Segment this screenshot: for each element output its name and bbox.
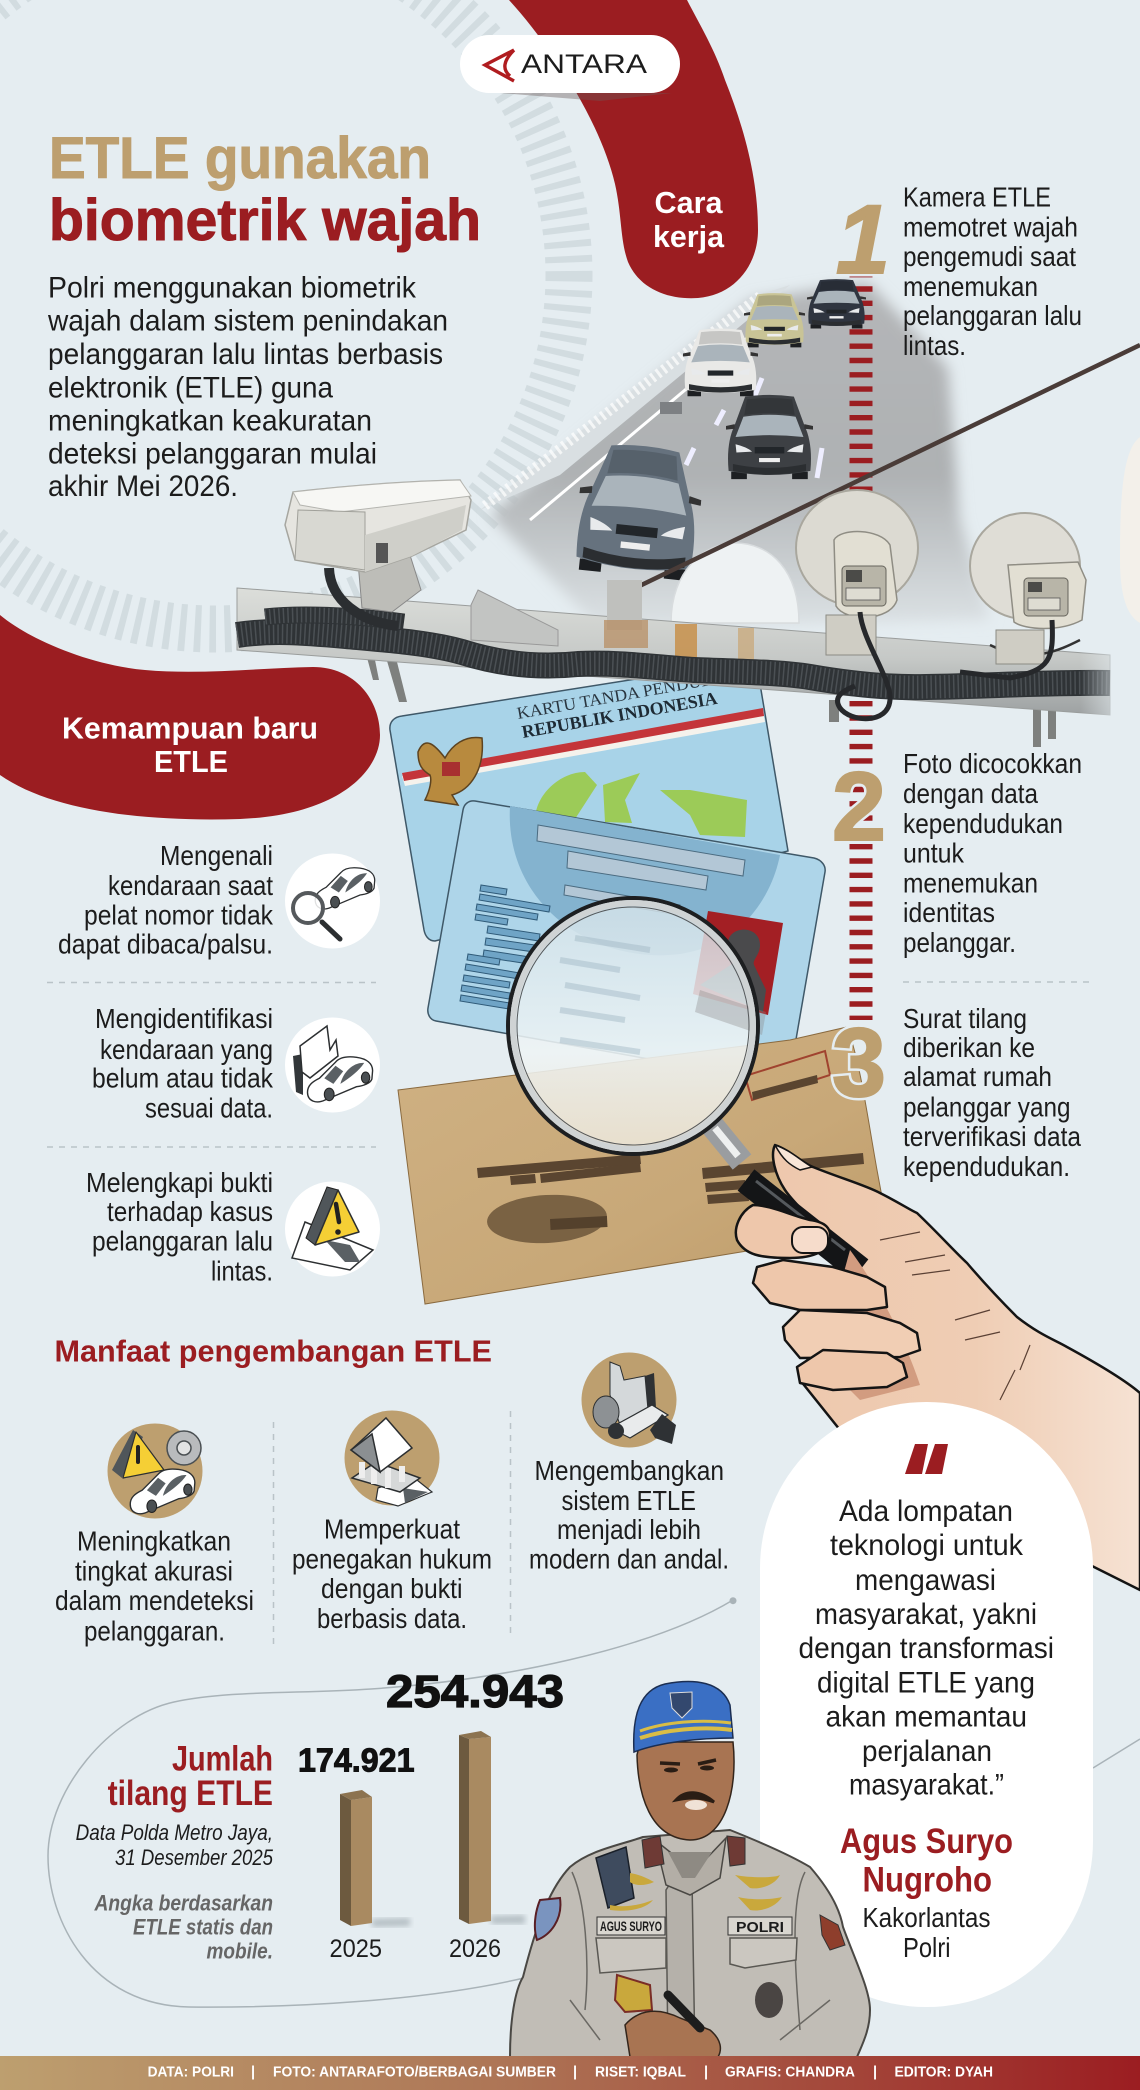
footer bar: GRAFIS: CHANDRA [725,2065,856,2081]
text: capability 1: Mengenali [160,840,273,871]
icon: car with documents [285,1018,380,1112]
pockets and seams [596,1868,797,2057]
flashlight [668,1995,700,2028]
illustration: magnifier lens [508,898,766,1154]
text: step 3: terverifikasi data [903,1121,1082,1152]
text: speaker name: Nugroho [862,1860,992,1900]
dashed dividers [47,982,376,1147]
illustration: police officer [510,1682,870,2057]
value 254.943: 254.943 [386,1666,564,1717]
icon: car with magnifier [285,854,380,948]
illustration: right side pale column [1120,437,1140,623]
text: quote: akan memantau [826,1700,1027,1734]
illustration: cars on the road [571,279,866,582]
text: step 1 [903,182,1082,361]
text: step 2: dengan data [903,778,1039,809]
face [637,1742,734,1840]
text: data note: ETLE statis dan [133,1914,273,1940]
text: quote: perjalanan [862,1735,992,1768]
heading: Manfaat pengembangan ETLE: Manfaat pengembangan ETLE [54,1334,492,1368]
name tag AGUS SURYO: AGUS SURYO [600,1918,662,1934]
shoulder patches [535,1898,560,1940]
text: benefit 3: modern dan andal. [529,1544,729,1575]
name tag POLRI [728,1917,792,1936]
text: benefit 1: tingkat akurasi [75,1556,233,1587]
text: capability 1: kendaraan saat [108,870,273,901]
text: benefit 1: pelanggaran. [84,1615,225,1646]
text: capability 1 [58,840,273,960]
text: step 3: kependudukan. [903,1151,1070,1182]
text: capability 3: terhadap kasus [107,1196,273,1227]
text: capability 2: belum atau tidak [92,1063,273,1094]
epaulettes [642,1836,745,1868]
text: step 2: untuk [903,838,964,869]
text: step 3: Surat tilang [903,1003,1027,1034]
illustration: KTP back card: REPUBLIK INDONESIA [520,688,719,742]
intro paragraph: pelanggaran lalu lintas berbasis [48,338,443,371]
number 3: 3 [832,1008,886,1117]
text: quote: masyarakat.” [849,1768,1004,1801]
footer bar: FOTO: ANTARAFOTO/BERBAGAI SUMBER [273,2065,556,2081]
insignia [610,1873,782,1911]
footer bar: DATA: POLRI [148,2065,234,2081]
text: benefit 1: Meningkatkan [77,1526,231,1556]
heading: Jumlah tilang ETLE: tilang ETLE [108,1774,273,1813]
neck shirt [668,1852,712,1878]
text: benefit 2: dengan bukti [321,1573,462,1604]
text: step 1: pelanggaran lalu [903,300,1082,331]
text: step 3 [903,1003,1082,1182]
chest badge [615,1975,652,2012]
title [49,126,481,253]
text: benefit 1 [55,1526,254,1646]
icon: courthouse [344,1410,440,1506]
text: capability 2 [92,1003,273,1124]
illustration: KTP back card: KARTU TANDA PENDUDUK [515,665,741,723]
title: biometrik wajah [49,188,481,253]
heading: Cara kerja [653,185,725,254]
value 174.921: 174.921 [298,1741,414,1778]
text: benefit 3: sistem ETLE [562,1485,696,1516]
illustration: hand palm and thumb [773,1145,1140,1590]
icon: accuracy [108,1424,202,1518]
text: step 2: pelanggar. [903,927,1016,958]
bar 2025 [340,1790,410,1927]
dashed red route line [850,272,872,1020]
text: capability 3: lintas. [211,1256,273,1286]
text: capability 3: pelanggaran lalu [92,1226,273,1257]
text: capability 3: Melengkapi bukti [86,1167,273,1198]
hands [625,2011,720,2057]
heading: Cara kerja: kerja [653,219,725,254]
text: quote: teknologi untuk [830,1529,1024,1562]
text: capability 2: kendaraan yang [100,1034,273,1065]
text: quote [798,1495,1054,1801]
text: capability 3 [86,1167,273,1286]
number 2: 2 [832,752,886,861]
text: speaker name [840,1822,1013,1963]
illustration: dish camera right [960,513,1086,678]
text: benefit 3: menjadi lebih [557,1514,701,1545]
number 3: 3 [832,1008,886,1117]
label 2026: 2026 [449,1935,501,1963]
illustration: KTP back card [390,660,788,941]
text: quote: dengan transformasi [798,1632,1054,1665]
text: data note: mobile. [206,1938,273,1964]
text: capability 1: pelat nomor tidak [84,900,273,931]
illustration: guy wire [625,345,1140,593]
heading: Jumlah tilang ETLE [108,1740,273,1813]
text: benefit 2: Memperkuat [324,1514,460,1544]
heading: Jumlah tilang ETLE: Jumlah [172,1740,273,1778]
text: step 1: memotret wajah [903,212,1078,242]
text: benefit 3 [529,1455,729,1575]
sleeve seams [570,1872,830,2040]
footer bar: | [704,2065,708,2081]
footer bar: | [573,2065,577,2081]
police cap [634,1682,733,1752]
intro paragraph: elektronik (ETLE) guna [48,372,333,405]
panel: Cara kerja ribbon [509,0,758,298]
text: step 3: alamat rumah [903,1061,1052,1092]
text: capability 1: dapat dibaca/palsu. [58,929,273,960]
text: step 2 [903,748,1082,958]
bar 2026 [459,1731,525,1924]
text: quote: mengawasi [855,1564,996,1597]
footer bar: EDITOR: DYAH [894,2065,993,2081]
illustration: KTP front card [428,801,825,1082]
footer bar: | [251,2065,255,2081]
text: data source: 31 Desember 2025 [115,1845,274,1870]
text: quote: digital ETLE yang [817,1666,1035,1700]
text: speaker name: Kakorlantas [862,1902,990,1933]
panel: quote bubble [760,1402,1093,2007]
decorative ring of ticks [0,0,569,629]
text: step 3: pelanggar yang [903,1092,1070,1123]
panel: Kemampuan baru ribbon [0,615,380,819]
text: data source: Data Polda Metro Jaya, [76,1820,273,1845]
heading: Kemampuan baru ETLE [62,711,318,779]
text: capability 2: Mengidentifikasi [95,1003,273,1034]
connector line with dot [48,1597,1140,2007]
text: data note [94,1891,273,1964]
illustration: dish camera left [796,490,918,719]
text: quote: masyarakat, yakni [815,1598,1037,1631]
text: step 3: diberikan ke [903,1032,1035,1063]
text: benefit 2: berbasis data. [317,1603,467,1634]
text: data note: Angka berdasarkan [94,1891,273,1916]
intro paragraph: wajah dalam sistem penindakan [47,305,448,338]
illustration: highway road [480,282,990,630]
intro paragraph: deteksi pelanggaran mulai [48,438,377,471]
logo: ANTARA: ANTARA [521,49,647,79]
illustration: pale dish behind cameras [671,543,799,623]
collar [655,1838,726,1895]
intro paragraph: meningkatkan keakuratan [48,405,372,438]
text: benefit 1: dalam mendeteksi [55,1585,254,1616]
number 1: 1 [836,185,890,294]
text: benefit 3: Mengembangkan [534,1455,724,1486]
text: speaker name: Agus Suryo [840,1822,1013,1861]
name tag POLRI: POLRI [736,1919,784,1936]
icon: quotation mark [905,1444,948,1474]
text: step 1: menemukan [903,271,1038,302]
icon: warning with photo [285,1182,380,1276]
illustration: pole with cables [237,580,1140,750]
text: step 2: kependudukan [903,808,1063,839]
illustration: envelope [398,1027,890,1304]
text: benefit 2: penegakan hukum [292,1544,492,1575]
text: capability 2: sesuai data. [145,1092,273,1124]
text: quote: Ada lompatan [839,1495,1013,1528]
uniform [510,1830,870,2057]
footer bar [0,2056,1140,2090]
intro paragraph: Polri menggunakan biometrik [48,272,417,304]
text: benefit 2 [292,1514,492,1634]
text: step 2: menemukan [903,868,1038,898]
text: data source [76,1820,274,1870]
text: step 1: pengemudi saat [903,241,1076,272]
text: step 2: identitas [903,897,995,928]
footer bar: | [873,2065,877,2081]
label 2025: 2025 [330,1935,382,1963]
icon: thumb up CCTV [582,1352,676,1448]
title: ETLE gunakan [49,126,431,191]
illustration: hand fingers [736,1145,1030,1400]
illustration: box CCTV camera [285,480,471,626]
heading: Kemampuan baru ETLE: Kemampuan baru [62,711,318,746]
text: step 1: Kamera ETLE [903,182,1051,213]
intro paragraph [47,272,448,503]
intro paragraph: akhir Mei 2026. [48,470,238,503]
number 2: 2 [832,752,886,861]
radio [596,1847,634,1908]
sunglasses [755,1982,783,2018]
bar chart [298,1666,564,1963]
heading: Kemampuan baru ETLE: ETLE [154,744,228,779]
name tag AGUS SURYO [597,1917,665,1935]
vertical dividers [274,1411,510,1646]
heading: Cara kerja: Cara [654,185,723,220]
logo: ANTARA [460,35,680,101]
text: step 2: Foto dicocokkan [903,748,1082,779]
text: step 1: lintas. [903,330,966,361]
footer bar: RISET: IQBAL [595,2065,686,2081]
number 1: 1 [836,185,890,294]
illustration: magnifier handle [706,1118,860,1270]
text: speaker name: Polri [903,1932,950,1963]
eyes and moustache [660,1760,716,1810]
